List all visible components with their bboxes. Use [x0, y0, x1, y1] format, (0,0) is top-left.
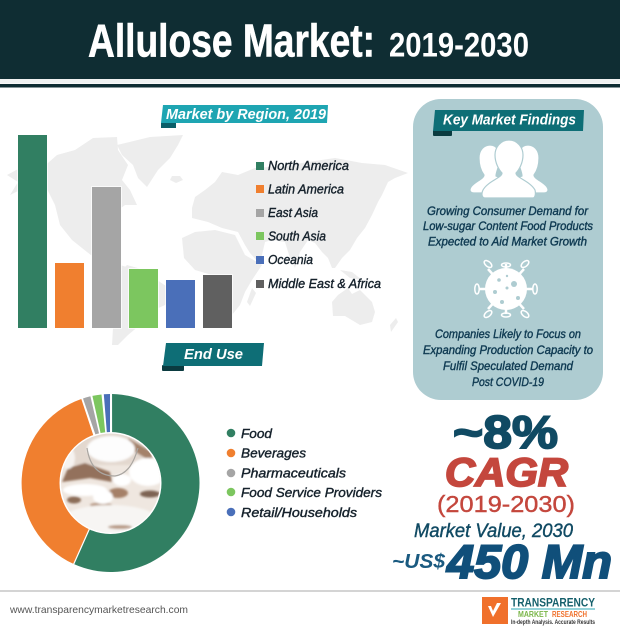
stat: market value: Market Value, 2030 — [414, 521, 573, 542]
header banner — [0, 0, 620, 88]
stat: CAGR: CAGR — [445, 451, 568, 495]
stat: market value: ~US$ — [392, 551, 446, 573]
segment: food — [74, 394, 200, 572]
segment: retail households — [104, 394, 110, 434]
stat: market value: 450 Mn — [446, 535, 612, 588]
text: consumer demand finding: Low-sugar Content Food Products — [423, 219, 593, 233]
background world map — [7, 135, 408, 345]
text: consumer demand finding: Growing Consumer Demand for — [427, 204, 589, 218]
legend: regions: Middle East & Africa — [268, 276, 381, 291]
text: production capacity finding — [423, 327, 593, 389]
icon: virus — [475, 259, 537, 319]
legend: end use: Retail/Households — [241, 505, 358, 520]
bar chart: market by region — [18, 135, 232, 328]
legend: end use: Pharmaceuticals — [241, 466, 347, 480]
legend: end use: Food — [241, 426, 273, 441]
heading: key market findings: Key Market Findings — [443, 112, 576, 128]
text: consumer demand finding — [423, 204, 593, 248]
text: consumer demand finding: Expected to Aid Market Growth — [428, 234, 587, 248]
stat: CAGR: (2019-2030) — [437, 491, 575, 517]
segment: food service providers — [92, 394, 105, 435]
photo: allulose sugar cubes — [60, 432, 167, 535]
heading: end use: End Use — [184, 346, 243, 363]
legend: end use — [227, 426, 383, 520]
text: production capacity finding: Expanding Production Capacity to — [423, 343, 593, 357]
legend: regions: North America — [268, 158, 349, 173]
legend: end use: Beverages — [241, 446, 307, 460]
segment: pharmaceuticals — [83, 396, 100, 436]
title: 2019-2030 — [389, 26, 529, 64]
legend: regions — [256, 158, 381, 291]
text: production capacity finding: Post COVID-19 — [472, 375, 544, 389]
panel: key market findings — [413, 99, 603, 400]
footer divider — [0, 590, 620, 592]
icon: group of people — [470, 140, 548, 198]
logo: transparency market research: In-depth Analysis. Accurate Results — [511, 619, 595, 626]
legend: end use: Food Service Providers — [241, 485, 383, 500]
stat: market value — [392, 521, 612, 588]
text: production capacity finding: Fulfil Speculated Demand — [443, 359, 573, 373]
donut chart: end use — [22, 394, 200, 572]
heading: end use — [162, 343, 264, 371]
heading: market by region: Market by Region, 2019 — [166, 106, 327, 123]
stat: CAGR: ~8% — [453, 406, 558, 458]
legend: regions: Oceania — [268, 252, 313, 267]
website url: www.transparencymarketresearch.com — [9, 604, 188, 616]
legend: regions: Latin America — [268, 182, 344, 196]
legend: regions: South Asia — [268, 228, 326, 244]
heading: key market findings — [433, 110, 584, 136]
logo: transparency market research: RESEARCH — [552, 610, 587, 619]
text: production capacity finding: Companies Likely to Focus on — [435, 327, 581, 341]
stat: CAGR — [437, 406, 575, 517]
logo: transparency market research: TRANSPARENCY — [511, 598, 595, 610]
logo: transparency market research: MARKET — [518, 610, 548, 619]
legend: regions: East Asia — [268, 205, 318, 220]
segment: beverages — [22, 399, 94, 564]
title: Allulose Market: — [88, 14, 375, 66]
logo: transparency market research — [482, 597, 595, 626]
